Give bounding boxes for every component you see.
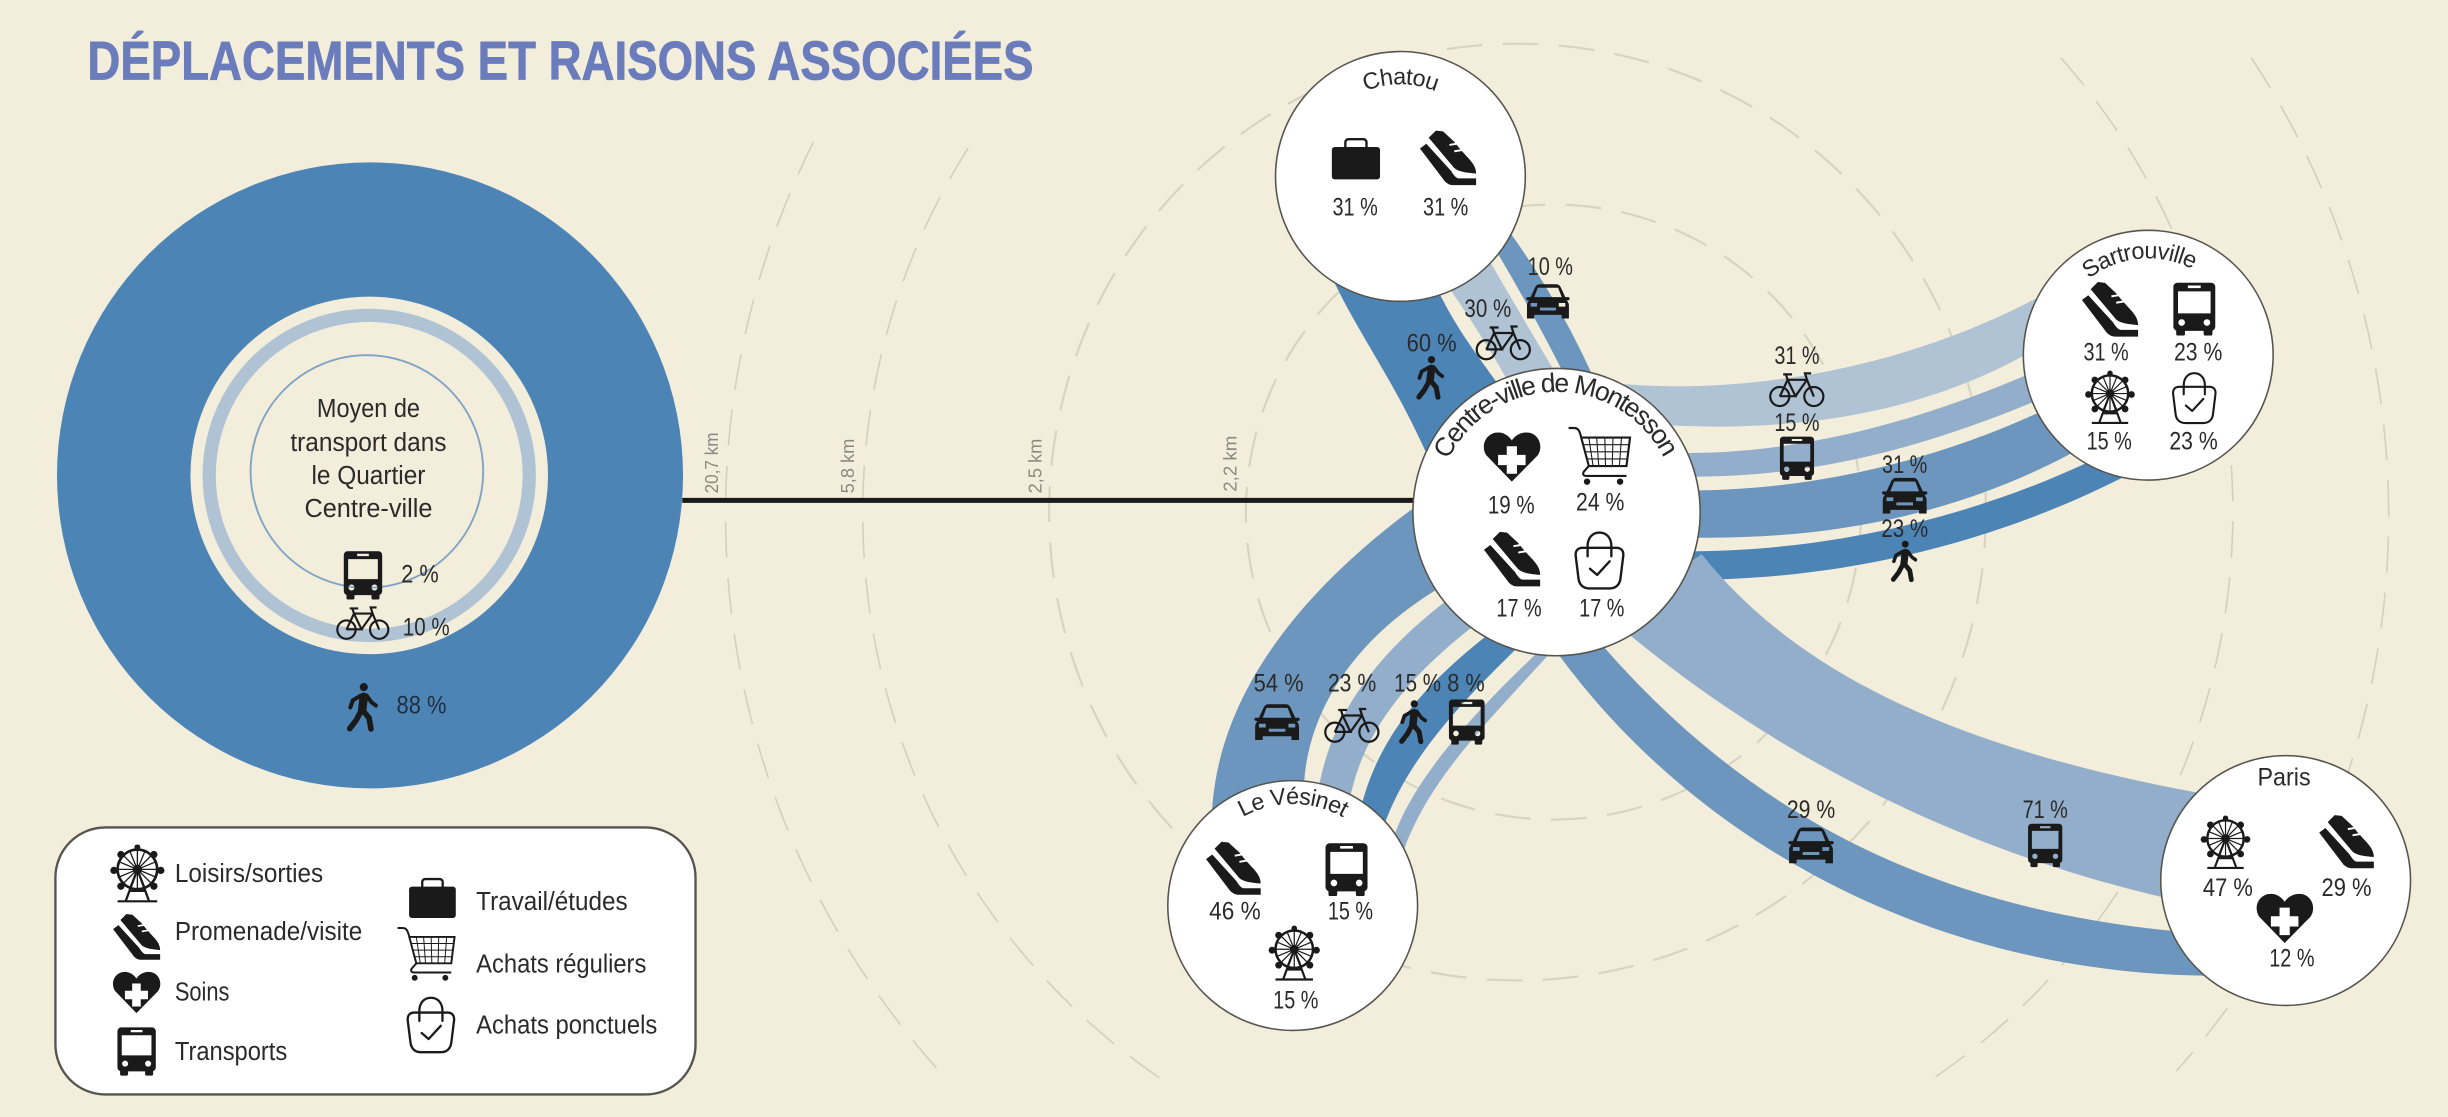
flow: bus 8 %	[1447, 670, 1485, 745]
text: ring caption: Moyen de	[317, 395, 420, 423]
flow labels: Le Vésinet	[1254, 670, 1485, 745]
legend: Transports	[117, 1027, 287, 1076]
flows: Paris	[1538, 554, 2217, 976]
legend: Loisirs/sorties	[110, 844, 323, 901]
flow: bus 15 %	[1774, 409, 1820, 480]
flow labels: Paris	[1787, 796, 2068, 867]
icon: bus 2 %	[344, 551, 439, 600]
flow: bike 30 %	[1464, 295, 1530, 359]
legend: Promenade/visite	[113, 914, 362, 960]
flow: walker 60 %	[1407, 329, 1457, 397]
flow: walker 15 %: 15 %	[1394, 670, 1441, 698]
node: Sartrouville: 15 %	[2087, 428, 2132, 456]
node: Chatou: 31 %	[1423, 193, 1468, 221]
node: Centre-ville de Montesson: Centre-ville de Montesson	[1436, 372, 1674, 456]
flow: walker 60 %: 60 %	[1407, 329, 1457, 357]
flow: car 10 %: 10 %	[1528, 253, 1573, 281]
legend: Promenade/visite: Promenade/visite	[175, 918, 362, 946]
flows: Le Vésinet	[1212, 503, 1555, 851]
distance axis	[682, 432, 1418, 500]
flow labels: Chatou	[1407, 253, 1573, 397]
flow: bus 8 %: 8 %	[1447, 670, 1485, 698]
inner gap	[190, 297, 548, 654]
node: Paris: 12 %	[2269, 944, 2315, 972]
legend: Transports: Transports	[175, 1038, 287, 1066]
node: Paris: 47 %	[2203, 874, 2253, 902]
node: Le Vésinet	[1167, 780, 1418, 1032]
node: Paris: Paris	[2258, 763, 2311, 791]
legend: Travail/études: Travail/études	[476, 888, 628, 916]
icon: bike 10 %	[337, 607, 450, 641]
text: ring caption: transport dans	[290, 429, 447, 457]
node: Le Vésinet: Le Vésinet	[1237, 786, 1349, 818]
flow: bus 71 %	[2023, 796, 2068, 867]
ring: transport share	[251, 355, 483, 588]
flow: car 31 %	[1882, 451, 1927, 514]
node: Le Vésinet: 46 %	[1209, 898, 1261, 926]
donut: walking share	[57, 162, 683, 788]
label: 5,8 km: 5,8 km	[837, 439, 858, 493]
node: Centre-ville de Montesson	[1412, 368, 1701, 656]
text: ring caption	[290, 395, 447, 523]
flow: bike 23 %: 23 %	[1328, 670, 1376, 698]
legend: Achats réguliers: Achats réguliers	[476, 951, 646, 979]
distance rings	[726, 44, 2389, 1082]
icon: bike 10 %: 10 %	[403, 613, 450, 641]
flow labels: Sartrouville	[1770, 342, 1928, 580]
node: Centre-ville de Montesson: 17 %	[1496, 595, 1542, 623]
flow: bike 31 %: 31 %	[1774, 342, 1820, 370]
flow: walker 23 %: 23 %	[1881, 515, 1928, 543]
ring: bicycle share	[209, 315, 529, 635]
legend: Soins: Soins	[175, 979, 230, 1007]
flow: walker 23 %	[1881, 515, 1928, 580]
icon: walker 88 %	[350, 683, 447, 729]
legend: Achats ponctuels: Achats ponctuels	[476, 1012, 657, 1040]
flow: bike 23 %	[1325, 670, 1378, 742]
flow: car 54 %	[1254, 670, 1304, 740]
node: Centre-ville de Montesson: 19 %	[1488, 492, 1535, 520]
flow: bike 30 %: 30 %	[1464, 295, 1511, 323]
node: Le Vésinet: 15 %	[1328, 898, 1373, 926]
legend: Soins	[113, 972, 230, 1013]
node: Le Vésinet: 15 %	[1273, 987, 1318, 1015]
node: Sartrouville: 23 %	[2169, 428, 2218, 456]
flows: Chatou	[1330, 234, 1596, 476]
node: Sartrouville: 31 %	[2083, 339, 2129, 367]
flows: Sartrouville	[1624, 294, 2154, 580]
node: Sartrouville: 23 %	[2174, 339, 2222, 367]
text: ring caption: le Quartier	[311, 462, 426, 490]
label: 2,5 km: 2,5 km	[1024, 439, 1045, 493]
node: Sartrouville	[2022, 230, 2274, 481]
node: Centre-ville de Montesson: 24 %	[1576, 489, 1624, 517]
legend: Achats réguliers	[398, 928, 646, 981]
flow: car 31 %: 31 %	[1882, 451, 1927, 479]
flow: car 10 %	[1526, 253, 1573, 319]
icon: bus 2 %: 2 %	[401, 560, 439, 588]
node: Sartrouville: Sartrouville	[2082, 244, 2196, 276]
node: Paris: 29 %	[2322, 874, 2371, 902]
legend: Achats ponctuels	[408, 998, 657, 1052]
legend: Loisirs/sorties: Loisirs/sorties	[175, 860, 323, 888]
legend: Travail/études	[409, 879, 628, 918]
flow: car 54 %: 54 %	[1254, 670, 1304, 698]
flow: car 29 %: 29 %	[1787, 796, 1835, 824]
text: ring caption: Centre-ville	[304, 495, 432, 523]
flow: car 29 %	[1787, 796, 1835, 863]
node: Chatou: 31 %	[1333, 193, 1378, 221]
flow: bus 15 %: 15 %	[1774, 409, 1820, 437]
icon: walker 88 %: 88 %	[397, 691, 447, 719]
panel: modes inside the Quartier	[57, 162, 683, 788]
flow: bike 31 %	[1770, 342, 1823, 406]
panel: legend	[55, 827, 696, 1094]
node: Chatou: Chatou	[1364, 68, 1438, 91]
node: Paris	[2161, 756, 2411, 1005]
node: Centre-ville de Montesson: 17 %	[1579, 595, 1624, 623]
node: Chatou	[1274, 50, 1526, 302]
flow: walker 15 %	[1394, 670, 1441, 742]
flow: bus 71 %: 71 %	[2023, 796, 2068, 824]
label: 2,2 km: 2,2 km	[1219, 436, 1240, 492]
label: 20,7 km: 20,7 km	[701, 432, 722, 493]
title: DÉPLACEMENTS ET RAISONS ASSOCIÉES	[87, 30, 1034, 92]
